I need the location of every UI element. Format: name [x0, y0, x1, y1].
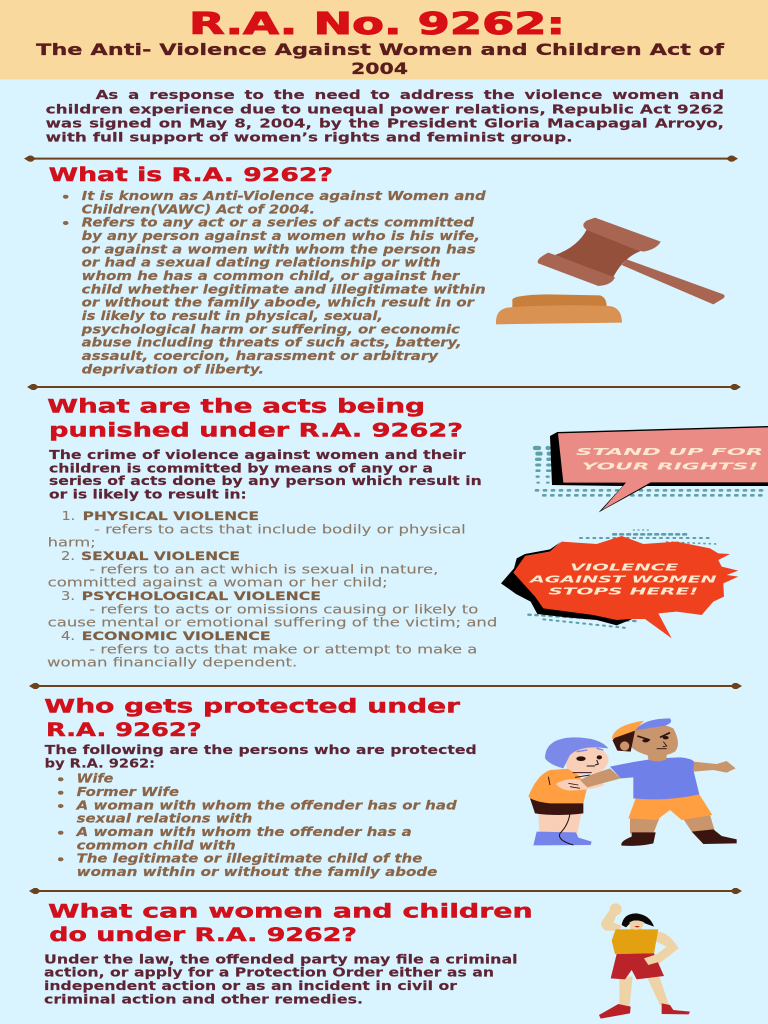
speech bubble: stand up for your rights: STAND UP FOR [576, 447, 763, 458]
panel: what can women and children do [44, 902, 690, 1019]
paragraph: remedies: independent action or as an incident in civil or [44, 979, 458, 993]
numbered list of violence types: 1. [62, 509, 75, 523]
subtitle: The Anti- Violence Against Women and Children Act of [36, 40, 725, 59]
bulleted list of protected persons: A woman with whom the offender has a [75, 825, 412, 839]
heading: who gets protected: R.A. 9262? [46, 720, 202, 741]
bulleted list of protected persons: The legitimate or illegitimate child of the [77, 852, 422, 866]
speech bubble: violence against women stops here: STOPS HERE! [548, 586, 698, 597]
panel: who gets protected [44, 697, 737, 879]
numbered list of violence types: 2. [61, 549, 75, 563]
numbered list of violence types: cause mental or emotional suffering of the victim; and [48, 616, 497, 630]
paragraph: remedies: action, or apply for a Protection Order either as an [44, 966, 494, 980]
speech bubble: stand up for your rights: YOUR RIGHTS! [582, 461, 758, 472]
speech bubble: violence against women stops here: AGAINST WOMEN [528, 575, 718, 586]
bulleted definition list: child whether legitimate and illegitimate within [82, 282, 486, 296]
numbered list of violence types: - refers to acts or omissions causing or likely to [89, 602, 478, 616]
heading: what can women do [48, 902, 533, 946]
intro paragraph: The crime of violence against women and their [49, 448, 467, 462]
intro paragraph: or is likely to result in: [49, 487, 247, 501]
bulleted list of protected persons: sexual relations with [77, 812, 252, 826]
bulleted definition list: or against a women with whom the person has [82, 242, 476, 256]
numbered list of violence types: committed against a woman or her child; [48, 576, 388, 590]
speech bubble: violence against women stops here: VIOLENCE [570, 563, 679, 574]
illustration: woman raising fist [599, 903, 690, 1019]
bulleted list of protected persons [58, 772, 457, 879]
intro text [46, 88, 724, 145]
heading: acts punished: punished under R.A. 9262? [49, 421, 463, 442]
panel: what is R.A. 9262 [49, 165, 725, 376]
bulleted list of protected persons: woman within or without the family abode [77, 865, 437, 879]
intro paragraph: children is committed by means of any or a [49, 461, 433, 475]
numbered list of violence types: harm; [48, 536, 96, 550]
heading: what is: What is R.A. 9262? [49, 165, 333, 186]
child [528, 737, 609, 845]
numbered list of violence types: - refers to acts that include bodily or physical [94, 522, 466, 536]
heading: who gets protected: Who gets protected under [44, 697, 461, 718]
subtitle: 2004 [351, 59, 408, 78]
intro text: with full support of women’s rights and feminist group. [46, 131, 573, 145]
numbered list of violence types: woman financially dependent. [47, 656, 297, 670]
numbered list of violence types: 4. [61, 629, 75, 643]
intro sentence: by R.A. 9262: [45, 756, 155, 770]
bulleted definition list: abuse including threats of such acts, battery, [82, 336, 462, 350]
intro sentence: The following are the persons who are protected [45, 743, 477, 757]
heading: what can women do: What can women and children [48, 902, 533, 923]
bulleted definition list: psychological harm or suffering, or economic [80, 322, 460, 336]
panel: acts punished [47, 397, 768, 670]
bulleted definition list: by any person against a women who is his wife, [82, 229, 480, 243]
bulleted definition list: or without the family abode, which result in or [82, 296, 475, 310]
subtitle [36, 40, 725, 78]
numbered list of violence types [47, 509, 497, 670]
bulleted definition list [63, 189, 486, 376]
bulleted list of protected persons: Wife [77, 772, 113, 786]
numbered list of violence types: ECONOMIC VIOLENCE [82, 629, 271, 643]
numbered list of violence types: PSYCHOLOGICAL VIOLENCE [82, 589, 321, 603]
paragraph: remedies [44, 952, 518, 1006]
numbered list of violence types: - refers to acts that make or attempt to make a [89, 642, 477, 656]
intro text: children experience due to unequal power relations, Republic Act 9262 [46, 103, 724, 117]
intro text: As a response to the need to address the violence women and [96, 88, 724, 102]
heading: acts punished [47, 397, 463, 442]
speech bubble: violence against women stops here [501, 530, 738, 638]
speech bubble: stand up for your rights [535, 426, 768, 512]
boy [580, 718, 737, 846]
title: R.A. No. 9262: [189, 7, 565, 42]
intro paragraph: series of acts done by any person which result in [49, 474, 482, 488]
bulleted definition list: whom he has a common child, or against her [82, 269, 461, 283]
bulleted list of protected persons: Former Wife [77, 785, 179, 799]
heading: who gets protected [44, 697, 461, 741]
bulleted definition list: Children(VAWC) Act of 2004. [82, 202, 315, 216]
bulleted definition list: is likely to result in physical, sexual, [82, 309, 383, 323]
numbered list of violence types: 3. [61, 589, 75, 603]
bulleted definition list: assault, coercion, harassment or arbitrary [82, 349, 439, 363]
bulleted definition list: It is known as Anti-Violence against Women and [82, 189, 486, 203]
header band [0, 0, 768, 80]
intro paragraph [49, 448, 482, 501]
bulleted list of protected persons: A woman with whom the offender has or had [75, 798, 457, 812]
illustration: boy grabbing child [528, 718, 737, 846]
numbered list of violence types: PHYSICAL VIOLENCE [83, 509, 259, 523]
intro sentence [45, 743, 477, 770]
heading: what can women do: do under R.A. 9262? [49, 925, 357, 946]
paragraph: remedies: criminal action and other remedies. [44, 992, 363, 1006]
paragraph: remedies: Under the law, the offended party may file a criminal [44, 952, 518, 966]
numbered list of violence types: - refers to an act which is sexual in nature, [89, 562, 438, 576]
numbered list of violence types: SEXUAL VIOLENCE [81, 549, 240, 563]
bulleted definition list: Refers to any act or a series of acts committed [82, 216, 475, 230]
bulleted definition list: or had a sexual dating relationship or with [82, 256, 441, 270]
heading: acts punished: What are the acts being [47, 397, 425, 418]
bulleted list of protected persons: common child with [77, 838, 236, 852]
intro text: was signed on May 8, 2004, by the President Gloria Macapagal Arroyo, [46, 117, 724, 131]
icon: gavel [496, 218, 725, 324]
bulleted definition list: deprivation of liberty. [82, 362, 264, 376]
